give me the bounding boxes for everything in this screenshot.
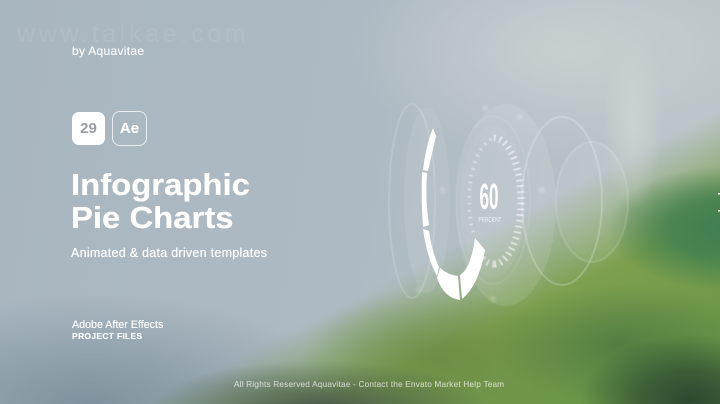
- translucent discs: [404, 104, 628, 306]
- software label: Adobe After Effects: [72, 319, 163, 331]
- white pie arc segments: [422, 128, 485, 300]
- thin outline rings: [389, 104, 628, 298]
- gauge tick ring: [469, 138, 521, 264]
- title: [71, 167, 250, 235]
- faint disc dots: [417, 106, 545, 302]
- gauge caption: PERCENT: [478, 215, 502, 224]
- watermark: www.talkae.com: [17, 20, 249, 48]
- badge: version 29: 29: [80, 120, 97, 137]
- badge: After Effects: Ae: [120, 120, 139, 137]
- project files label: PROJECT FILES: [72, 331, 142, 341]
- edge marks: [718, 193, 720, 212]
- badge: version 29: [72, 112, 105, 145]
- pie chart graphic: 60: [480, 176, 498, 217]
- subtitle: Animated & data driven templates: [71, 246, 267, 260]
- title: Infographic: [71, 167, 250, 202]
- badge: After Effects: [112, 111, 147, 146]
- byline: by Aquavitae: [72, 44, 144, 58]
- footer copyright: All Rights Reserved Aquavitae - Contact the Envato Market Help Team: [234, 380, 504, 389]
- title: Pie Charts: [71, 200, 234, 235]
